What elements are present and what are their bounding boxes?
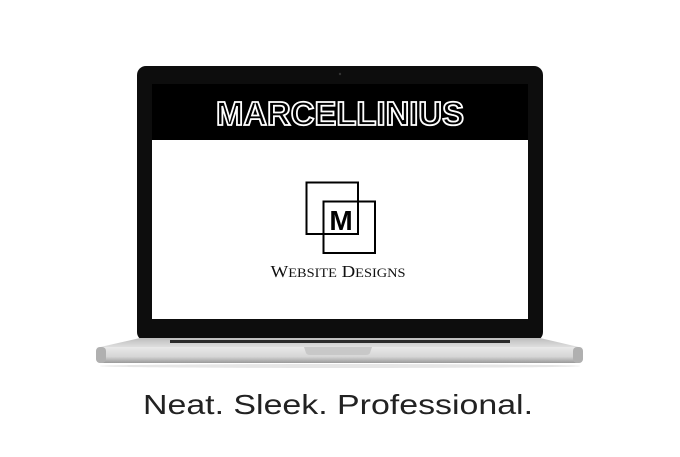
laptop: [96, 66, 583, 368]
screen content white: [152, 140, 528, 319]
laptop lid: [137, 66, 543, 341]
screen header bar: [152, 84, 528, 140]
title: MARCELLINIUS: MARCELLINIUS: [216, 95, 464, 132]
text: Website Designs: WEBSITE DESIGNS: [270, 262, 406, 281]
laptop base: [96, 338, 583, 368]
logo: M: [329, 205, 353, 236]
logo: [306, 182, 375, 253]
camera: [339, 73, 341, 75]
tagline: Neat. Sleek. Professional.: [143, 389, 533, 420]
